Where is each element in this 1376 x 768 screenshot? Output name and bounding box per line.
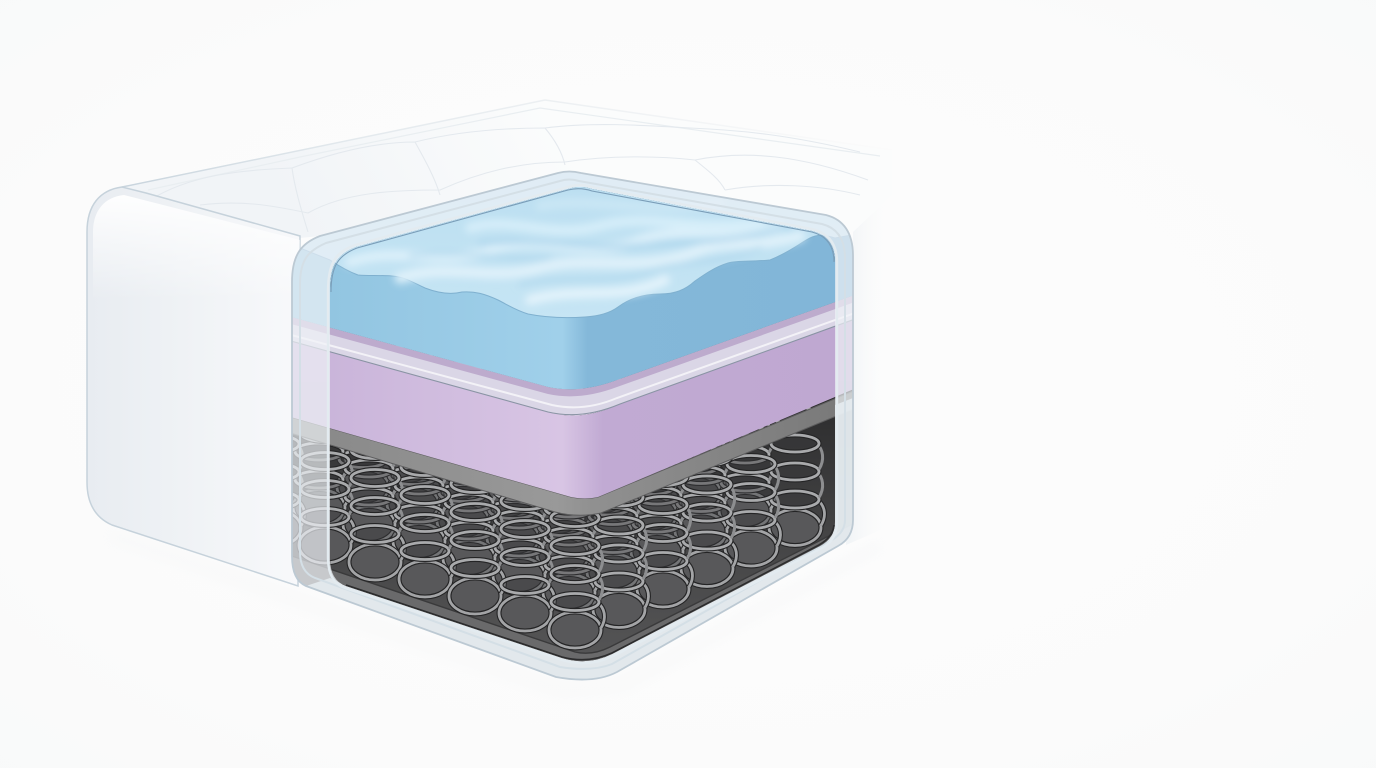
inner top edge line: [331, 189, 834, 292]
glass frame highlight: [300, 180, 845, 669]
mattress front face: [87, 187, 300, 586]
ground shadow: [110, 535, 880, 690]
inner frame line: [328, 185, 837, 663]
inner bottom edge line: [346, 525, 834, 660]
mattress right side face: [846, 195, 892, 545]
front face highlight: [93, 195, 300, 300]
pale glass rim along bottom and right: [306, 398, 853, 680]
mattress top face with quilting: [122, 100, 892, 238]
cutaway window: [291, 170, 854, 680]
glass frame fill: [292, 172, 853, 680]
ghost layers seen through the glass: [292, 172, 852, 678]
glass frame outline: [292, 172, 853, 680]
layered core: foam, comfort layer, springs: [330, 187, 835, 662]
mattress body: [87, 100, 892, 586]
